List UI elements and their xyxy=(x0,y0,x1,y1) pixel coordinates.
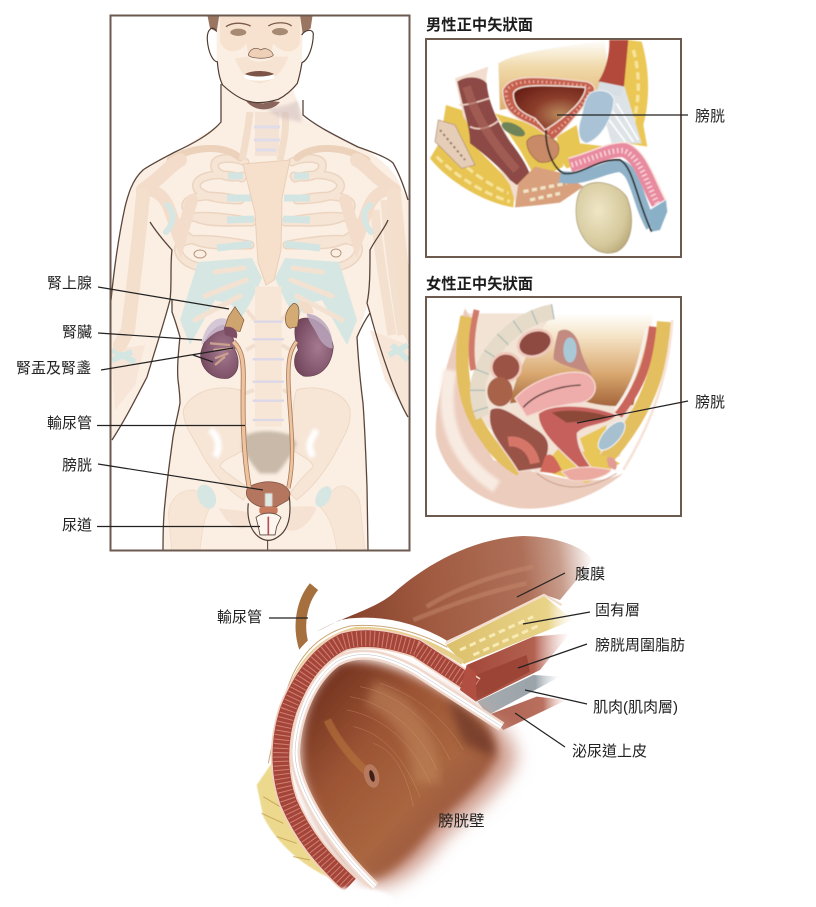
lumbar spine xyxy=(255,287,282,427)
panel: male sagittal xyxy=(426,39,681,257)
leader: ureter lower xyxy=(269,617,308,619)
rectum fold xyxy=(508,441,535,463)
fat mottling left xyxy=(437,150,510,202)
fat between rectum and bladder xyxy=(495,113,563,180)
pubic bone xyxy=(594,417,630,454)
pelvis highlight xyxy=(210,430,317,457)
leader: perivesical fat xyxy=(518,644,587,668)
kidney right xyxy=(295,318,333,376)
muscle layer xyxy=(281,639,475,885)
uterine cavity xyxy=(523,385,581,407)
sacrum xyxy=(435,120,475,168)
clitoris xyxy=(607,457,617,470)
spine processes xyxy=(245,310,292,393)
mouth xyxy=(245,71,274,76)
kidney base left xyxy=(224,327,237,338)
anterior fat xyxy=(580,425,607,463)
leader: adrenal xyxy=(98,287,229,309)
muscle right xyxy=(598,40,628,87)
eyes xyxy=(230,29,246,36)
ureteric orifice xyxy=(361,762,382,789)
label: lamina propria: 固有層 xyxy=(595,602,640,619)
urothelium xyxy=(488,697,567,730)
penile pink xyxy=(570,150,658,203)
ribs left xyxy=(120,148,262,345)
label: bladder: 膀胱 xyxy=(62,457,92,474)
spine discs xyxy=(253,322,284,420)
sacrum marks xyxy=(440,130,465,160)
skin light xyxy=(447,370,497,487)
panel: full body urinary system xyxy=(100,15,417,551)
penis xyxy=(256,513,281,535)
pelvic floor xyxy=(540,447,620,483)
pelvis left xyxy=(183,388,250,500)
male frame xyxy=(426,39,681,257)
label: muscle: 肌肉(肌肉層) xyxy=(593,699,678,716)
lamina layer xyxy=(273,629,463,763)
perineum xyxy=(515,167,583,207)
leader: male bladder xyxy=(557,114,688,116)
body frame xyxy=(110,16,410,550)
brows xyxy=(226,23,292,27)
ureteric ridge xyxy=(327,720,368,773)
lower left fat xyxy=(257,763,343,883)
bladder wall interior xyxy=(302,661,497,880)
wall shadow xyxy=(447,697,494,757)
skull xyxy=(220,17,300,57)
ribs right xyxy=(275,148,417,345)
vulva xyxy=(562,467,612,481)
muscle fade xyxy=(597,82,624,97)
prostate xyxy=(527,135,559,162)
bladder wall xyxy=(503,77,595,140)
femur right xyxy=(317,486,365,550)
penile stripes xyxy=(572,151,657,203)
face xyxy=(217,15,303,103)
urethra xyxy=(266,517,271,535)
peritoneal surface xyxy=(317,536,593,642)
body silhouette xyxy=(100,63,408,550)
right muscle xyxy=(618,327,653,415)
surface cut edge xyxy=(445,595,562,643)
pelvic base xyxy=(467,313,653,473)
adrenal left xyxy=(225,307,244,332)
penile blue xyxy=(560,166,652,227)
rectum xyxy=(489,408,549,472)
nipples xyxy=(194,249,341,258)
glans xyxy=(650,200,667,232)
wall outer fade xyxy=(302,661,517,887)
fat right xyxy=(605,322,664,460)
label: urothelium: 泌尿道上皮 xyxy=(572,743,647,760)
rectum xyxy=(457,77,531,185)
bladder lumen xyxy=(513,86,585,130)
uterus xyxy=(515,372,595,417)
lamina streaks xyxy=(460,617,540,655)
leader: bladder xyxy=(98,464,263,490)
penile pink white edge xyxy=(568,142,666,200)
perineum mottling xyxy=(523,183,567,200)
spine discs xyxy=(478,312,553,417)
renal calyces xyxy=(210,343,232,365)
urethra xyxy=(546,130,652,232)
ureter xyxy=(301,587,314,650)
femur left xyxy=(168,490,212,550)
muscle cut xyxy=(476,655,530,700)
female frame xyxy=(426,297,681,516)
panel: female sagittal xyxy=(426,297,681,516)
teeth xyxy=(244,74,275,81)
leader: renal pelvis xyxy=(101,348,233,370)
heading: female: 女性正中矢狀面 xyxy=(426,275,533,293)
muscle hatching xyxy=(281,639,475,885)
ureter left xyxy=(233,342,249,488)
leader: urethra xyxy=(97,526,260,528)
wall striations xyxy=(347,683,463,807)
ovary xyxy=(554,330,592,375)
label: bladder wall: 膀胱壁 xyxy=(438,812,485,830)
fat left xyxy=(462,317,520,470)
sternum xyxy=(243,160,290,285)
leader: peritoneum xyxy=(517,573,565,597)
leader: lamina propria xyxy=(523,612,590,624)
adrenal right xyxy=(285,303,299,328)
peritoneal veil left xyxy=(202,318,228,345)
label: ureter lower: 輸尿管 xyxy=(217,608,262,626)
muscle cut end xyxy=(460,665,476,702)
arms shading xyxy=(111,330,408,415)
label: peritoneum: 腹膜 xyxy=(575,566,605,583)
leader: female bladder xyxy=(577,401,688,423)
fat left xyxy=(430,105,515,207)
surface striations xyxy=(413,567,533,620)
vagina and bladder xyxy=(538,406,617,468)
nose xyxy=(248,48,273,58)
right white xyxy=(615,328,647,410)
spine xyxy=(478,312,553,417)
neck spine xyxy=(242,112,286,160)
lamina propria surface xyxy=(446,596,573,664)
bottom fade xyxy=(307,888,393,907)
body midline xyxy=(266,541,269,550)
pubic rami xyxy=(218,506,317,531)
white tendons xyxy=(597,85,642,143)
label: adrenal: 腎上腺 xyxy=(47,275,92,292)
heading: male: 男性正中矢狀面 xyxy=(426,16,533,34)
skin buttock xyxy=(436,308,623,509)
pelvis right xyxy=(287,388,350,500)
label: female bladder: 膀胱 xyxy=(695,394,725,411)
abdominal wall skin xyxy=(623,320,672,470)
illustration: bladder wall layers xyxy=(257,536,593,907)
fat mottling right xyxy=(633,50,638,123)
fat detail xyxy=(262,797,310,860)
seminal vesicle xyxy=(500,119,527,140)
bladder stripes xyxy=(506,82,590,133)
serosal white layer xyxy=(258,621,445,773)
label: ureter: 輸尿管 xyxy=(47,414,92,432)
abdominal cavity xyxy=(498,40,608,110)
rectum shading xyxy=(467,87,517,170)
femoral heads xyxy=(197,484,216,509)
sacral muscle xyxy=(472,310,477,370)
label: urethra: 尿道 xyxy=(62,517,92,534)
tendon lines xyxy=(607,103,638,143)
sacrum xyxy=(242,431,297,473)
right forearm bone xyxy=(375,200,402,335)
label: renal pelvis: 腎盂及腎盞 xyxy=(16,360,91,377)
bladder xyxy=(246,482,290,507)
jaw bone xyxy=(235,57,288,83)
cavity xyxy=(510,313,653,406)
kidney left xyxy=(201,325,238,379)
leader: ureter xyxy=(97,424,245,426)
label: male bladder: 膀胱 xyxy=(695,108,725,125)
mucosa layer xyxy=(295,655,502,887)
lamina gray xyxy=(477,675,560,715)
bladder lumen xyxy=(552,411,609,423)
fascia behind rectum xyxy=(455,67,537,207)
serosa edge xyxy=(268,625,447,763)
neck shadow xyxy=(265,100,302,122)
leaders and labels: body xyxy=(16,275,263,534)
fat right xyxy=(617,40,648,147)
lower torso group xyxy=(168,287,365,550)
label: kidney: 腎臟 xyxy=(62,324,92,341)
head outline xyxy=(207,28,313,103)
rectum folds xyxy=(459,98,499,129)
peritoneal veil right xyxy=(307,313,333,348)
leader: urothelium xyxy=(515,713,565,747)
bladder light xyxy=(265,493,272,507)
head group xyxy=(207,15,313,103)
perineal body xyxy=(540,454,562,473)
left forearm bones xyxy=(112,345,408,362)
label: perivesical fat: 膀胱周圍脂肪 xyxy=(595,637,685,654)
leader: kidney xyxy=(98,333,202,340)
leader: muscle xyxy=(525,690,587,704)
prostate xyxy=(259,507,278,514)
muscle surface xyxy=(467,633,570,702)
pubic symphysis xyxy=(579,91,614,143)
fat center xyxy=(557,125,617,168)
colon loops xyxy=(514,325,556,361)
lower skin fold xyxy=(537,473,617,487)
scrotum xyxy=(576,183,632,253)
hair xyxy=(208,16,312,33)
adrenal cap right xyxy=(297,301,313,313)
wall highlight xyxy=(370,693,427,783)
genital outline xyxy=(248,497,290,540)
ureter right xyxy=(288,342,297,488)
body outline xyxy=(111,84,408,550)
